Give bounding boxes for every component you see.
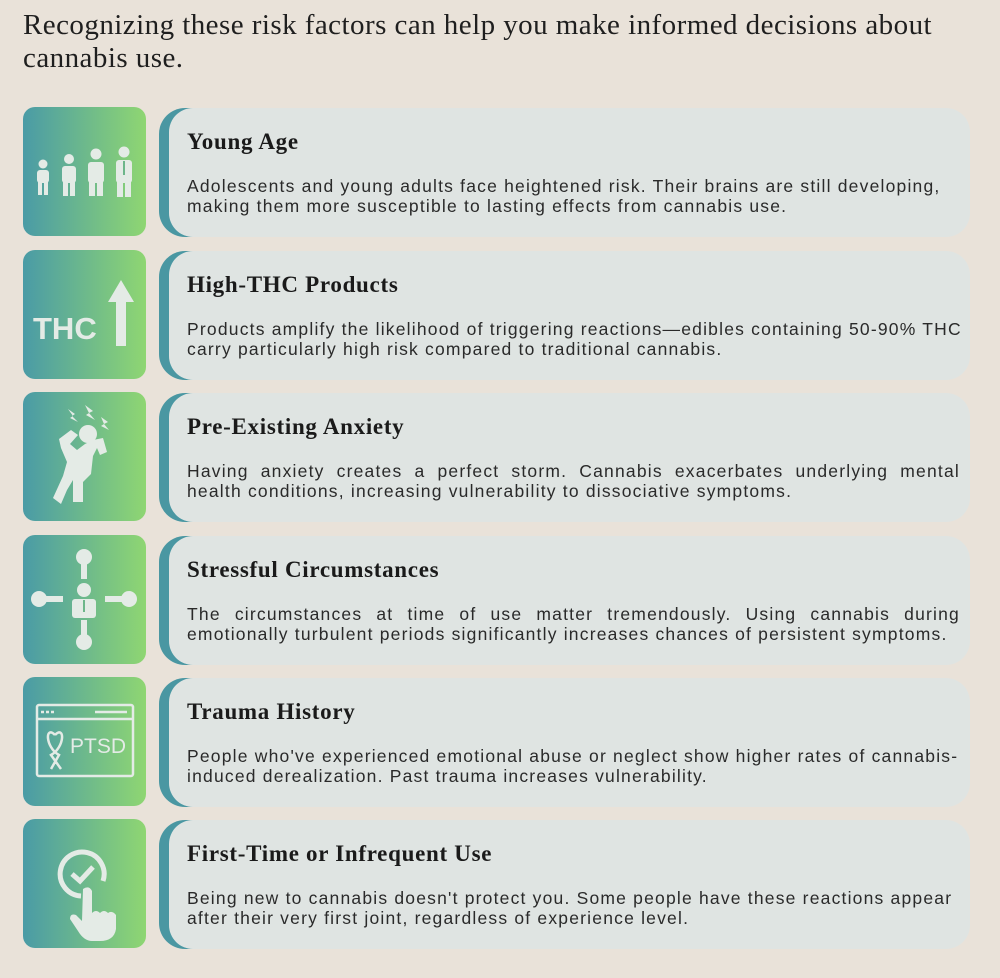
card text: First-Time or Infrequent Use [187, 841, 492, 866]
title: Recognizing these risk factors can help you make informed decisions about cannabis use. [23, 9, 932, 74]
icon: PTSD window: PTSD [70, 735, 126, 758]
card text: Pre-Existing Anxiety [187, 414, 404, 439]
icon: person with pressures [23, 535, 146, 664]
card text: The circumstances at time of use matter tremendously. Using cannabis during emotionally turbulent periods significantly increases chances of persistent symptoms. [187, 604, 960, 644]
card text: Trauma History [187, 699, 355, 724]
card text [169, 108, 970, 237]
card text: People who've experienced emotional abuse or neglect show higher rates of cannabis-induced derealization. Past trauma increases vulnerability. [187, 746, 958, 786]
card text: Having anxiety creates a perfect storm. Cannabis exacerbates underlying mental health conditions, increasing vulnerability to dissociative symptoms. [187, 461, 960, 501]
panel: trauma history [23, 677, 970, 807]
icon: PTSD window [23, 677, 146, 806]
panel: first-time use [23, 819, 970, 949]
card text: Products amplify the likelihood of triggering reactions—edibles containing 50-90% THC carry particularly high risk compared to traditional cannabis. [187, 319, 962, 359]
icon: people growing [23, 107, 146, 236]
card text: Adolescents and young adults face heightened risk. Their brains are still developing, making them more susceptible to lasting effects from cannabis use. [187, 176, 940, 216]
panel: high THC [23, 250, 970, 380]
card text: Young Age [187, 129, 299, 154]
card text [169, 678, 970, 807]
icon: THC up arrow [23, 250, 146, 379]
icon: tap check [23, 819, 146, 948]
card text [169, 820, 970, 949]
panel: stressful circumstances [23, 535, 970, 665]
card text: High-THC Products [187, 272, 398, 297]
panel: anxiety [23, 392, 970, 522]
card text: Stressful Circumstances [187, 557, 439, 582]
card text [169, 251, 970, 380]
card text: Being new to cannabis doesn't protect you. Some people have these reactions appear after their very first joint, regardless of experience level. [187, 888, 952, 928]
card text [169, 536, 970, 665]
icon: anxious person [23, 392, 146, 521]
card text [169, 393, 970, 522]
icon: THC up arrow: THC [33, 311, 97, 346]
panel: young age [23, 107, 970, 237]
